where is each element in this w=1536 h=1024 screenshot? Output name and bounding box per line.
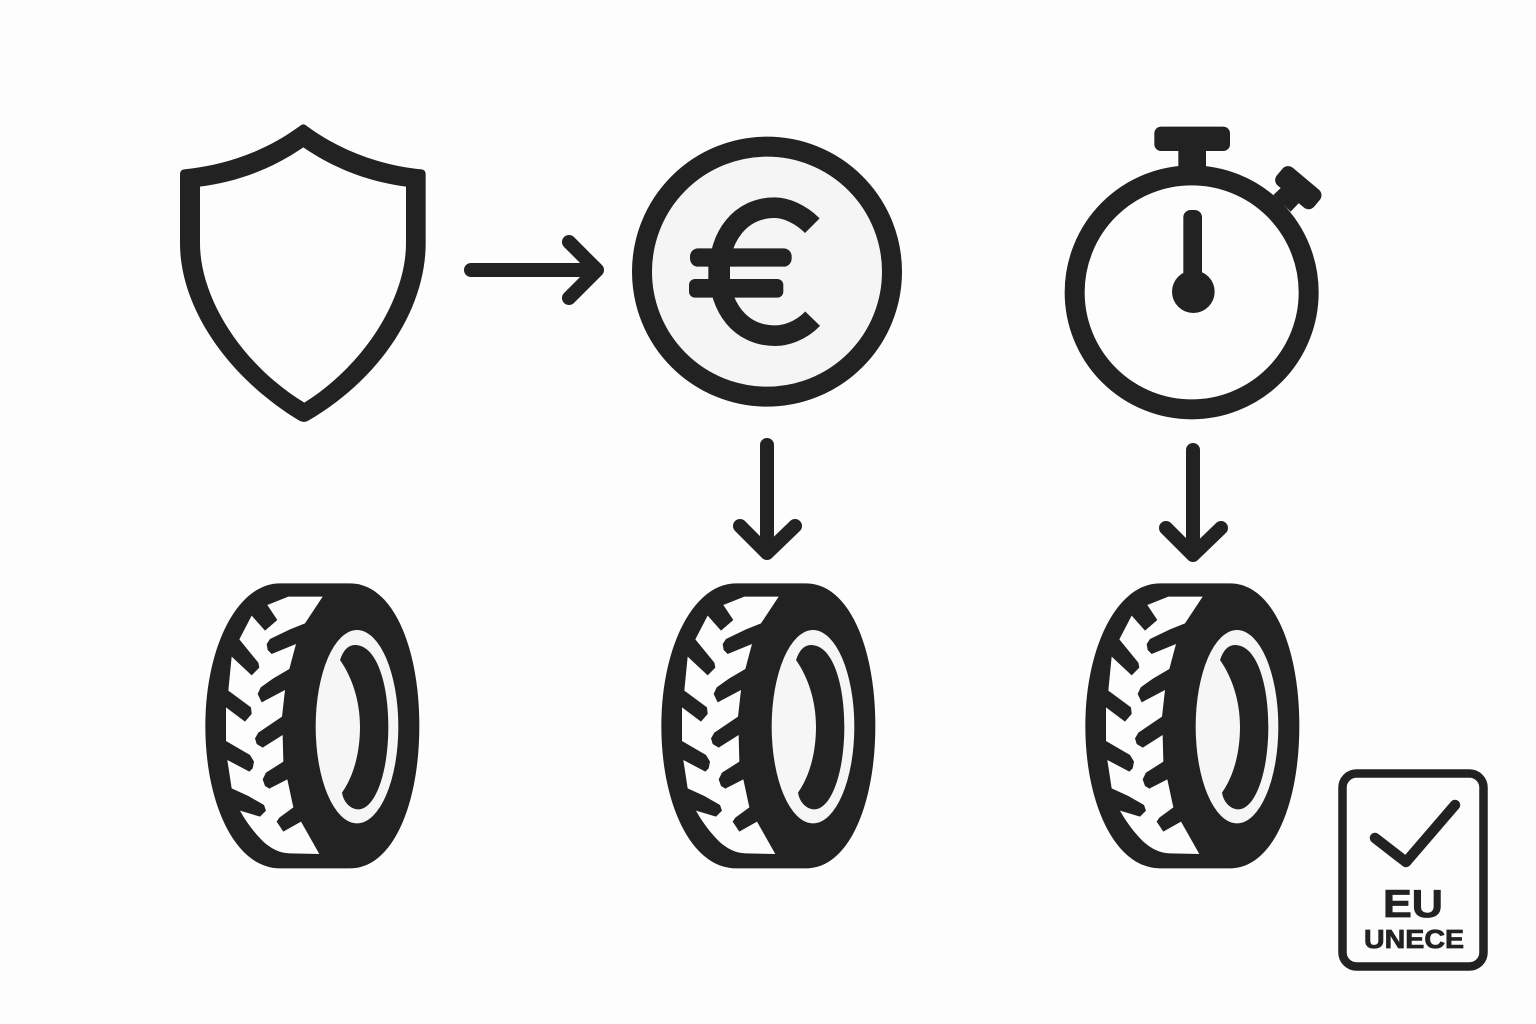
icon: tyre centre: [661, 583, 875, 868]
icon: stopwatch: [1075, 127, 1324, 409]
badge: EU UNECE approval: UNECE: [1364, 924, 1464, 954]
arrow: euro to tyre: [740, 445, 795, 553]
badge: EU UNECE approval: EU: [1383, 883, 1443, 926]
icon: shield: [180, 124, 426, 422]
icon: tyre right: [1085, 583, 1299, 868]
icon: tyre left: [205, 583, 419, 868]
badge: EU UNECE approval: [1342, 774, 1484, 966]
icon: euro coin: [642, 147, 892, 397]
arrow: stopwatch to tyre: [1166, 450, 1221, 555]
arrow: shield to euro: [471, 242, 597, 298]
